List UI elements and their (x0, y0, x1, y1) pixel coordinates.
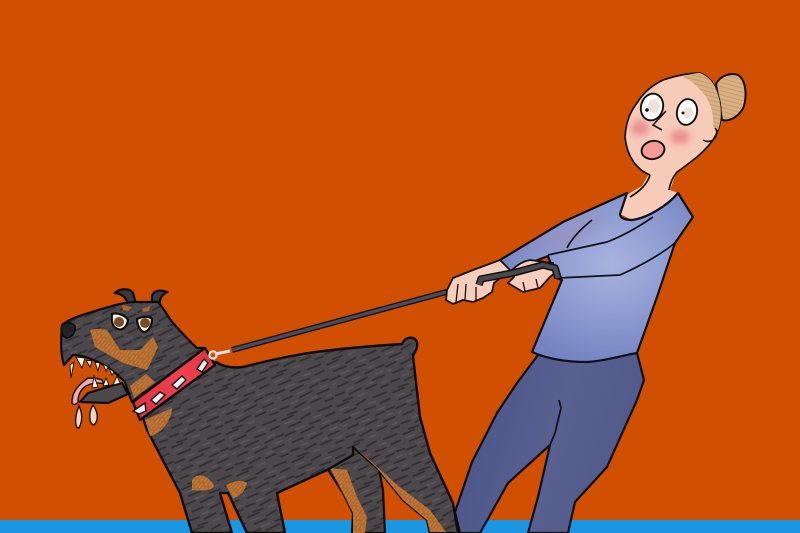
dog far hind leg (327, 447, 385, 533)
brow tan (122, 305, 150, 312)
leash from collar to hand (232, 291, 450, 350)
front leg tan (226, 481, 247, 498)
tongue (72, 378, 104, 404)
right eye (675, 97, 699, 127)
studs (133, 359, 208, 414)
dog head (61, 289, 205, 428)
leg crease (550, 400, 561, 445)
nose (653, 111, 666, 130)
neck line (630, 175, 650, 197)
woman's hands (446, 260, 556, 304)
drool (76, 405, 97, 428)
left ear (115, 289, 136, 306)
left hand (446, 260, 510, 304)
head shape (61, 302, 205, 402)
lower jaw (80, 383, 128, 403)
sleeve shading (525, 215, 610, 250)
neck tan (130, 374, 155, 398)
mouth (640, 139, 666, 161)
hair on head (683, 73, 721, 130)
blush (631, 120, 649, 136)
finger lines (456, 279, 538, 302)
right ear (152, 291, 167, 305)
mouth interior (72, 360, 125, 394)
woman's shirt (500, 193, 693, 362)
right hand (508, 260, 556, 292)
hair bun (716, 74, 746, 120)
floor stripe (0, 520, 800, 533)
nose (61, 323, 75, 338)
left eye (638, 91, 666, 123)
left eye (112, 313, 128, 330)
woman's legs (455, 353, 644, 533)
teeth (70, 357, 120, 388)
hind leg tan stripe (353, 446, 446, 532)
front leg tan (192, 475, 214, 490)
sleeve seam (548, 217, 675, 278)
dog collar (133, 348, 215, 420)
right eye (137, 317, 152, 332)
dog body (143, 338, 458, 533)
leash clip (209, 351, 230, 359)
face (625, 73, 721, 190)
neck (620, 168, 678, 220)
muzzle tan (90, 329, 158, 370)
chest tan (145, 408, 172, 436)
leash handle loop (479, 265, 558, 285)
ear (703, 128, 717, 141)
woman's head and neck (620, 73, 746, 220)
